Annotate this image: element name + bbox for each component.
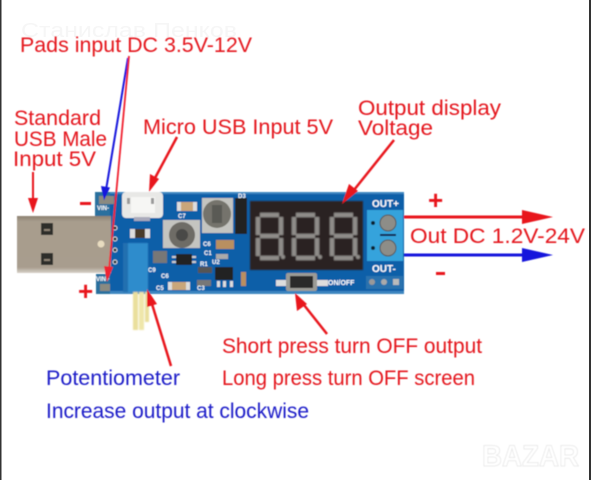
- sign: output plus: +: [428, 185, 443, 215]
- label: long press: Long press turn OFF screen: [222, 367, 475, 390]
- header holes: [113, 226, 117, 264]
- components: C6: [203, 242, 211, 248]
- micro USB port: [122, 192, 163, 221]
- USB male connector: [17, 216, 111, 273]
- arrow: pads negative, blue: [101, 58, 128, 200]
- terminal block: [366, 199, 403, 289]
- components: R1: [200, 262, 208, 268]
- potentiometer: [123, 243, 149, 330]
- arrow: micro USB: [149, 137, 177, 192]
- components: C6: [161, 274, 169, 280]
- components: C5: [156, 286, 164, 292]
- 7-segment display: [250, 201, 363, 270]
- arrow: standard USB: [28, 172, 38, 213]
- label: micro USB input: Micro USB Input 5V: [143, 116, 333, 139]
- label: standard USB male: Standard: [14, 107, 101, 130]
- sign: output minus: [436, 272, 445, 275]
- label: clockwise: Increase output at clockwise: [46, 400, 309, 423]
- arrow: pads positive, red: [104, 56, 129, 282]
- input pads: [96, 196, 114, 291]
- components: C1: [204, 251, 212, 257]
- components: U2: [212, 260, 220, 266]
- label: potentiometer: Potentiometer: [46, 367, 180, 390]
- label: pads input: Pads input DC 3.5V-12V: [20, 34, 252, 57]
- components: C3: [197, 286, 205, 292]
- inductors: [163, 198, 233, 248]
- label: standard USB male: [13, 107, 107, 171]
- label: standard USB male: USB Male: [14, 128, 107, 151]
- components: C9: [148, 268, 156, 274]
- components: [130, 194, 247, 292]
- watermark: Bazar logo: BAZAR: [482, 440, 579, 473]
- components: C7: [178, 214, 186, 220]
- arrow: output positive: [404, 210, 553, 224]
- terminal block: OUT-: [372, 264, 396, 275]
- on/off push button: [276, 273, 355, 291]
- label: output display voltage: Output display: [358, 97, 502, 120]
- arrow: push button: [295, 293, 327, 334]
- input pads: VIN-: [97, 206, 109, 212]
- label: short press: Short press turn OFF output: [222, 335, 482, 358]
- sign: input plus: +: [78, 276, 93, 306]
- input pads: VIN+: [96, 277, 110, 283]
- watermark: author name: Станислав Пенков: [21, 20, 237, 42]
- arrow: potentiometer: [147, 289, 171, 366]
- arrow: output negative: [404, 248, 553, 262]
- terminal block: OUT+: [372, 199, 399, 210]
- label: output DC range: Out DC 1.2V-24V: [410, 225, 585, 248]
- components: D3: [238, 194, 246, 200]
- sign: input minus: [80, 202, 91, 205]
- on/off push button: ON/OFF: [328, 280, 355, 287]
- label: output display voltage: [358, 97, 502, 140]
- label: standard USB male: Input 5V: [13, 148, 96, 171]
- label: output display voltage: Voltage: [358, 117, 433, 140]
- arrow: display voltage: [342, 140, 394, 204]
